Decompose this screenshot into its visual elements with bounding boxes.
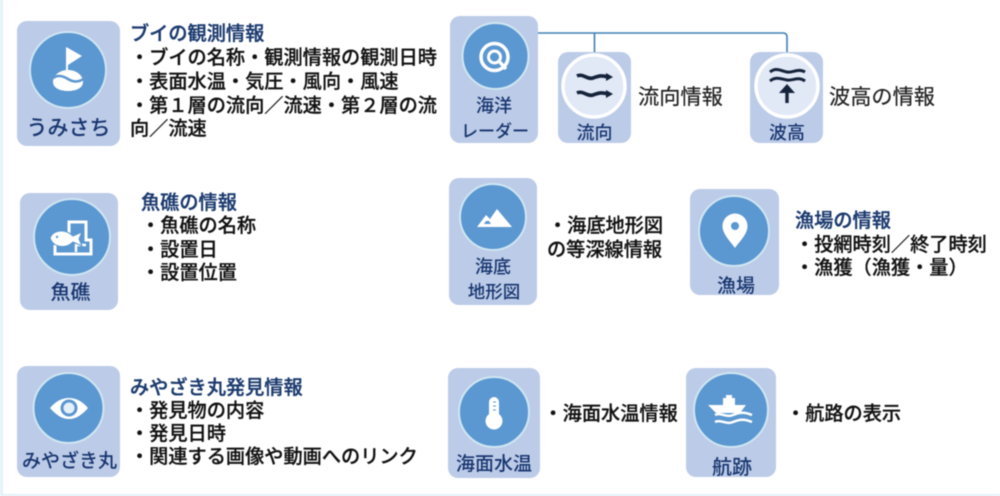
text: wave height info: 波高の情報 xyxy=(829,85,935,109)
text block: fishing ground list xyxy=(795,234,987,279)
panel: ocean radar xyxy=(450,16,538,143)
panel: fishing ground xyxy=(690,189,987,297)
text block: buoy info list: 向／流速 xyxy=(130,118,207,140)
text block: findings list xyxy=(130,400,418,468)
icon: thermometer xyxy=(459,377,529,447)
card: Miyazaki Maru xyxy=(17,366,120,477)
text block: fish reef list: ・魚礁の名称 xyxy=(141,215,256,237)
label: fishing ground: 漁場 xyxy=(717,275,755,297)
heading: fish reef info: 魚礁の情報 xyxy=(141,192,237,214)
panel: sea surface temperature xyxy=(448,368,540,478)
label: seabed topography: 海底 xyxy=(475,257,511,277)
text block: buoy info list xyxy=(130,46,437,140)
text block: buoy info list: ・表面水温・気圧・風向・風速 xyxy=(130,71,399,93)
text block: fish reef list xyxy=(141,215,256,284)
text: route display: ・航路の表示 xyxy=(786,403,901,425)
label: seabed topography xyxy=(468,257,520,302)
icon: fish and reef xyxy=(34,199,110,275)
label: ocean radar xyxy=(461,96,529,141)
card: seabed topography xyxy=(449,178,537,305)
text block: findings list: ・関連する画像や動画へのリンク xyxy=(130,446,418,468)
card: wave height xyxy=(750,52,823,143)
text block: fish reef list: ・設置日 xyxy=(141,240,218,261)
text block: findings list: ・発見物の内容 xyxy=(130,400,264,422)
text block: seabed contour info: の等深線情報 xyxy=(547,239,662,261)
connector lines: ocean radar to current and wave height xyxy=(538,33,787,53)
card: umisachi xyxy=(17,21,120,146)
text block: fishing ground list: ・投網時刻／終了時刻 xyxy=(795,234,987,256)
card: fish reef xyxy=(20,193,118,310)
label: ocean radar: 海洋 xyxy=(476,96,512,116)
panel: track xyxy=(686,368,776,479)
icon: buoy with flag xyxy=(30,32,106,108)
icon: waves and up arrow xyxy=(756,55,818,117)
label: current: 流向 xyxy=(576,123,612,143)
label: fish reef: 魚礁 xyxy=(50,281,90,304)
panel: umisachi buoy xyxy=(17,21,437,146)
text block: fishing ground list: ・漁獲（漁獲・量） xyxy=(795,257,968,279)
text block: fish reef list: ・設置位置 xyxy=(141,262,237,284)
heading: fishing ground info: 漁場の情報 xyxy=(795,210,891,232)
text block: buoy info list: ・ブイの名称・観測情報の観測日時 xyxy=(130,46,437,69)
text: sea surface temperature info: ・海面水温情報 xyxy=(544,403,678,425)
card: sea surface temperature xyxy=(448,368,540,478)
label: Miyazaki Maru: みやざき丸 xyxy=(22,449,117,472)
panel: wave height xyxy=(750,52,823,143)
card: current xyxy=(558,52,631,143)
icon: current arrows xyxy=(563,55,625,117)
icon: radar xyxy=(462,23,528,89)
label: umisachi: うみさち xyxy=(26,117,110,140)
label: sea surface temperature: 海面水温 xyxy=(456,453,532,475)
label: track: 航跡 xyxy=(712,456,752,479)
label: wave height: 波高 xyxy=(769,123,805,143)
card: fishing ground xyxy=(690,189,779,295)
icon: mountains xyxy=(460,184,526,250)
text block: seabed contour info xyxy=(547,215,663,261)
heading: Miyazaki Maru findings: みやざき丸発見情報 xyxy=(130,376,303,399)
panel: fish reef xyxy=(20,192,256,310)
icon: eye xyxy=(34,373,104,443)
icon: map pin xyxy=(699,196,769,266)
text: current info: 流向情報 xyxy=(638,85,723,109)
icon: ship xyxy=(694,373,768,447)
card: track xyxy=(686,368,776,477)
text block: buoy info list: ・第１層の流向／流速・第２層の流 xyxy=(130,95,437,117)
label: ocean radar: レーダー xyxy=(461,121,529,141)
panel: Miyazaki Maru xyxy=(17,366,418,477)
heading: buoy observation info: ブイの観測情報 xyxy=(130,22,264,45)
panel: seabed topography xyxy=(449,178,537,305)
panel: current xyxy=(558,52,631,143)
card: ocean radar xyxy=(450,16,538,143)
text block: findings list: ・発見日時 xyxy=(130,423,226,445)
label: seabed topography: 地形図 xyxy=(468,282,520,302)
text block: seabed contour info: ・海底地形図 xyxy=(548,215,663,237)
